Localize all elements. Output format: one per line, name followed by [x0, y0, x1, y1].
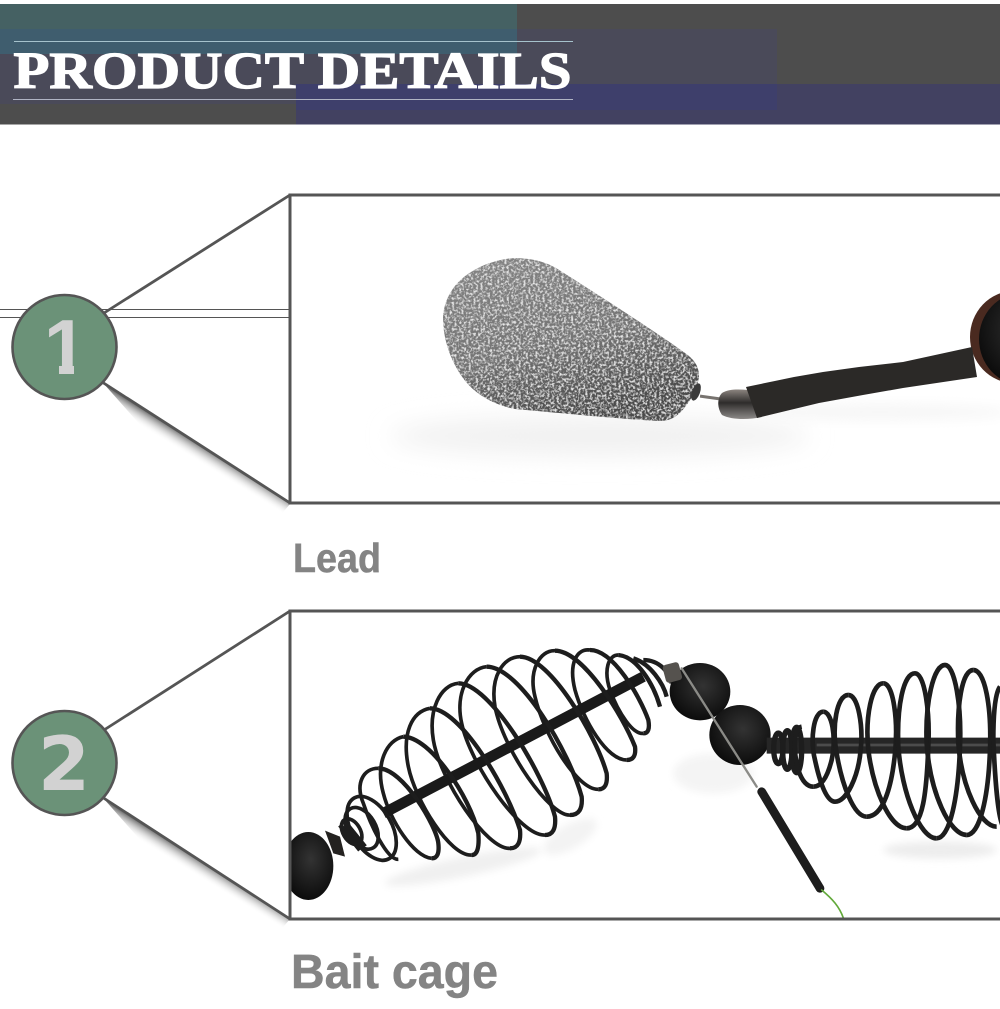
bead [970, 291, 1000, 385]
metal ferrule [718, 389, 762, 419]
callout 2 connector [102, 611, 290, 933]
cage rod [383, 677, 643, 813]
marker 1 [12, 295, 116, 399]
marker 1: 1 [44, 303, 87, 391]
hook link [682, 668, 844, 920]
title: PRODUCT DETAILS [14, 43, 572, 100]
label: Lead: Lead [293, 535, 381, 581]
title rule bottom [13, 99, 573, 100]
title rule top [14, 41, 573, 42]
marker 2: 2 [38, 720, 90, 808]
cage shadows [383, 753, 997, 893]
swivel link [662, 662, 682, 683]
second cage rod [766, 738, 1000, 754]
soft shadow under the lead [418, 418, 782, 454]
cage front coils [378, 650, 672, 858]
lead weight [443, 258, 699, 421]
black tube [746, 347, 977, 418]
cage back coils [360, 650, 643, 859]
middle beads [670, 663, 771, 765]
double divider lines behind marker 1 [0, 309, 290, 318]
marker 2 [12, 711, 116, 815]
swivel [691, 383, 720, 401]
left bead [292, 832, 334, 900]
second cage rod highlight [816, 744, 1000, 746]
header banner [0, 4, 1000, 124]
panel 2: bait cage photo [283, 611, 1000, 920]
panel 1: lead photo [290, 195, 1000, 503]
second cage coil end [774, 727, 802, 773]
left crimp [325, 831, 345, 857]
label: Bait cage: Bait cage [291, 946, 498, 999]
second cage coils [795, 665, 1000, 838]
callout 1 connector [102, 195, 290, 518]
left coil end [338, 794, 398, 862]
